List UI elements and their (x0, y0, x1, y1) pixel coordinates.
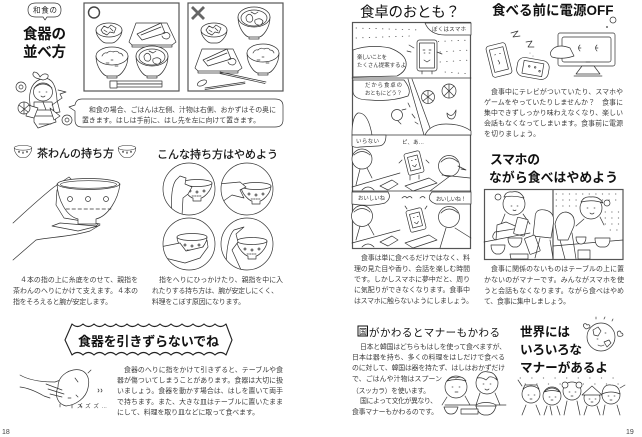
father in right panel (576, 197, 610, 226)
bad grip 2 (218, 163, 273, 215)
banner: do not drag dishes (65, 324, 232, 355)
illustration: hand dragging a dish (20, 370, 107, 410)
rice bowl (96, 47, 128, 78)
mother with phone (493, 192, 530, 240)
heading: manners vary by country: がかわるとマナーもかわる (369, 326, 500, 339)
bubble: dining companion offer: おともにどう？ (365, 89, 402, 97)
illustration: correct grip on bowl (13, 177, 120, 260)
comic panel 3: ピ、あ… (402, 139, 424, 146)
text: do not drag dishes: 食器のへりに指をかけて引きずると、テーブルや食 (124, 365, 283, 374)
bubble: いらない: いらない (356, 138, 379, 145)
icon: wrong mark (192, 7, 204, 19)
text: dining companion explanation: です。しかしスマホに夢中だと、周り (354, 274, 470, 284)
bubble: dining companion offer (353, 80, 409, 100)
heading: do not hold like this: こんな持ち方はやめよう (157, 147, 278, 161)
text: bad grips: 料理をこぼす原因になります。 (152, 297, 245, 306)
heading: world manners: いろいろな (520, 343, 582, 357)
heading: how to hold a rice bowl (14, 145, 136, 160)
page number 18: 18 (2, 429, 10, 436)
text: correct grip: 茶わんのへりにかけて支えます。４本の (13, 286, 138, 295)
left table (484, 233, 530, 259)
illustration: smartphone, game and TV (485, 17, 616, 81)
girl in right panel (555, 212, 576, 259)
text: dining companion explanation: 食事は単に食べるだけではなく、料 (361, 253, 470, 262)
illustration: two people eating Korean food (442, 372, 506, 415)
text: bad grips (152, 275, 283, 306)
text: manners vary by country: 国によって文化が異なり、 (360, 396, 437, 405)
bubble: おいしいね right: おいしいね！ (436, 196, 466, 203)
television (550, 17, 616, 76)
text: power off: ゲームをやっていたりしませんか？ 食事に (484, 98, 623, 106)
text: stop using phones while eating (484, 264, 624, 306)
heading: world manners (520, 325, 608, 375)
panel: correct table setting (84, 3, 179, 91)
sleep marks (511, 31, 534, 56)
side dish bowl (96, 23, 122, 43)
illustration: girl in kimono (16, 72, 72, 128)
text: stop using phones while eating: て、食事に集中しましょう。 (484, 296, 570, 306)
badge: 和食の: 和食の (33, 6, 57, 14)
comic panel 1 (352, 23, 471, 78)
heading: world manners: マナーがあるよ (520, 360, 608, 375)
text: do not drag dishes: で持ちます。また、大きな皿はテーブルに置いたまま (117, 397, 283, 406)
heading: power off before eating: 食べる前に電源OFF (492, 2, 614, 18)
text: dining companion explanation: に気配りができなくなります。食事中 (354, 285, 470, 294)
text: power off: 会話もなくなってしまいます。食事前に電源 (484, 118, 623, 128)
heading: stop using phones while eating (489, 152, 618, 185)
text: do not drag dishes (117, 365, 283, 416)
text: stop using phones while eating: 食事に関係のないものはテーブルの上に置 (491, 264, 624, 273)
illustration: smiling globe (583, 317, 623, 351)
text: manners vary by country: で、ごはんや汁物はスプーン (352, 374, 442, 383)
heading: manners vary by country: 国 (359, 328, 367, 336)
phone character (407, 40, 442, 74)
smartphone (485, 42, 513, 78)
rice bowl (247, 44, 279, 75)
text: bad grips: 指をへりにひっかけたり、親指を中に入 (159, 275, 283, 284)
panel: incorrect table setting (188, 3, 283, 91)
text: manners vary by country: （スッカラ）を使います。 (352, 386, 430, 395)
soup bowl (136, 46, 168, 78)
bubble: suggesting fun things (353, 46, 406, 77)
comic strip (352, 22, 471, 248)
text: power off (484, 87, 623, 138)
grilled fish plate (129, 23, 176, 47)
bad grip 4 (221, 218, 273, 272)
comic panel 3 (352, 135, 471, 191)
heading: how to hold a rice bowl: 茶わんの持ち方 (37, 146, 114, 160)
text: dining companion explanation: 理の見た目や香り、会話を楽しむ時間 (354, 264, 470, 273)
soup bowl (238, 7, 270, 39)
illustration: four bad grips (160, 163, 273, 272)
text: correct grip (13, 275, 138, 306)
bubble: ぼくはスマホ: ぼくはスマホ (432, 26, 467, 33)
text: do not drag dishes: いましょう。食器を動かす場合は、はしを置いて両手 (117, 386, 283, 395)
text: manners vary by country: 食事マナーもかわるのです。 (352, 407, 438, 416)
comic: family on phones at the table (484, 190, 623, 260)
heading: stop using phones while eating: スマホの (490, 152, 540, 167)
text: manners vary by country: 日本と韓国はどちらもはしを使って食べますが、 (360, 342, 506, 351)
heading: 食器の並べ方: 並べ方 (23, 43, 66, 61)
side dish bowl (201, 23, 227, 43)
callout: table setting explanation (69, 99, 283, 127)
callout: table setting explanation: 置きます。はしは手前に、はし先を左に向けて置きます。 (82, 116, 260, 124)
text: power off: 集中できずしっかり味わえなくなり、楽しい (484, 108, 623, 117)
heading: stop using phones while eating: ながら食べはやめよう (489, 170, 618, 185)
page number 19: 19 (626, 429, 634, 436)
icon: correct mark (88, 7, 100, 18)
bubble: suggesting fun things: 楽しいことを (357, 53, 387, 61)
text: dining companion explanation: はスマホに触らないようにしましょう。 (354, 296, 473, 305)
text: manners vary by country (352, 342, 506, 416)
text: dining companion explanation (354, 253, 473, 305)
bubble: おいしいね left: おいしいね (358, 195, 386, 202)
comic panel 2 (352, 79, 471, 135)
text: power off: を切りましょう。 (484, 130, 540, 138)
bubble: suggesting fun things: たくさん提案するよ (357, 61, 406, 69)
text: manners vary by country: 日本は器を持ち、多くの料理をはしだけで食べる (352, 352, 505, 362)
bad grip 1 (163, 163, 215, 216)
text: power off: 食事中にテレビがついていたり、スマホや (491, 87, 623, 96)
illustration: children of the world (518, 378, 625, 415)
text: manners vary by country: のに対して、韓国は器を持たず、はしはおかずだけ (352, 363, 505, 372)
badge: 和食の (28, 3, 61, 20)
heading: 食器の並べ方: 食器の (23, 25, 66, 43)
text: correct grip: ４本の指の上に糸底をのせて、親指を (20, 275, 138, 284)
comic panel 4 (352, 192, 471, 248)
text: bad grips: れたりする持ち方は、腕が安定しにくく、 (152, 286, 278, 295)
heading: 食器の並べ方 (23, 25, 66, 61)
text: stop using phones while eating: うと会話もなくなります。ながら食べはやめ (484, 286, 624, 295)
banner: do not drag dishes: 食器を引きずらないでね (78, 334, 219, 349)
illustration: hand dragging a dish: ズズズ… (77, 402, 107, 410)
bad grip 3 (160, 218, 215, 270)
text: do not drag dishes: にして、料理を取り皿などに取って食べます。 (117, 408, 259, 416)
text: correct grip: 指をそろえると腕が安定します。 (13, 297, 112, 306)
callout: table setting explanation: 和食の場合、ごはんは左側、汁物は右側、おかずはその奥に (89, 105, 276, 114)
chopsticks (196, 72, 266, 90)
text: do not drag dishes: 器が傷ついてしまうことがあります。食器は大切に扱 (117, 376, 283, 384)
heading: dining companion: 食卓のおとも？ (360, 4, 460, 21)
right table (553, 237, 623, 259)
game console (516, 56, 550, 81)
text: stop using phones while eating: かないのがマナーです。みんながスマホを使 (484, 275, 624, 284)
teen with phone (524, 210, 554, 258)
grilled fish plate (195, 49, 242, 73)
bubble: dining companion offer: だから食卓の (365, 81, 402, 89)
chopsticks (110, 81, 162, 88)
heading: world manners: 世界には (520, 325, 570, 339)
